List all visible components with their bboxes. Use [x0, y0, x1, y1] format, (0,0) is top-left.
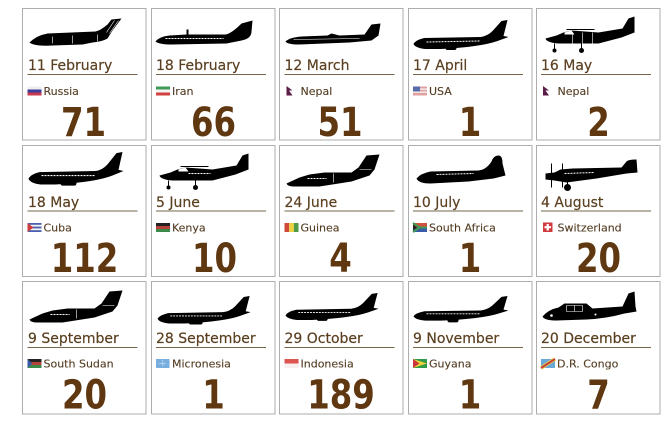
icon: plane [160, 154, 248, 190]
country: D.R. Congo [557, 358, 619, 370]
country: South Sudan [44, 358, 114, 370]
country: Nepal [300, 85, 332, 98]
flag: Nepal [286, 86, 292, 96]
number: 51 [317, 99, 363, 146]
date: 17 April [413, 58, 467, 74]
card: 28 September Micronesia [152, 282, 275, 418]
flag: USA [413, 86, 427, 96]
card: 18 May Cuba [22, 146, 146, 282]
card: 5 June Kenya [152, 146, 275, 282]
date: 9 September [28, 331, 119, 347]
flag: Indonesia [284, 359, 298, 368]
number: 1 [202, 371, 225, 418]
flag: Iran [156, 86, 170, 96]
number: 7 [587, 371, 610, 418]
flag: South Africa [413, 223, 427, 232]
card: 11 February Russia [22, 8, 146, 146]
date: 28 September [156, 331, 256, 347]
card: 10 July South Africa [408, 146, 532, 282]
card: 20 December D.R. Congo [536, 282, 660, 418]
date: 10 July [413, 195, 460, 211]
country: Micronesia [172, 358, 231, 370]
flag: Guinea [284, 223, 298, 232]
number: 66 [191, 99, 236, 146]
card: 12 March Nepal [280, 8, 403, 146]
date: 20 December [541, 331, 636, 347]
date: 9 November [413, 331, 499, 347]
date: 11 February [28, 58, 112, 74]
number: 71 [61, 99, 106, 146]
icon: plane [286, 154, 380, 186]
icon: plane [546, 160, 638, 191]
country: Guinea [300, 222, 340, 234]
card: 18 February Iran [152, 8, 275, 146]
country: Indonesia [300, 358, 354, 370]
number: 112 [51, 235, 118, 282]
country: Kenya [172, 222, 206, 234]
date: 4 August [541, 195, 604, 211]
date: 16 May [541, 58, 592, 74]
country: Guyana [429, 358, 471, 370]
country: Iran [172, 85, 194, 98]
country: USA [429, 85, 452, 98]
country: Russia [44, 85, 79, 98]
date: 24 June [284, 195, 337, 211]
flag: Guyana [413, 359, 427, 368]
number: 10 [192, 235, 237, 282]
card: 16 May Nepal [536, 8, 660, 146]
date: 29 October [284, 331, 363, 347]
number: 1 [459, 235, 481, 282]
flag: Nepal [543, 86, 549, 96]
flag: D.R. Congo [541, 359, 555, 368]
card: 9 September South Sudan [22, 282, 146, 418]
icon: plane [414, 20, 508, 50]
icon: plane [546, 16, 634, 53]
icon: plane [28, 152, 124, 186]
date: 18 May [28, 195, 79, 211]
card: 24 June Guinea [280, 146, 403, 282]
card: 17 April USA [408, 8, 532, 146]
card: 29 October Indonesia [280, 282, 403, 418]
country: Nepal [558, 85, 589, 98]
country: Cuba [44, 222, 72, 234]
date: 5 June [156, 195, 200, 211]
number: 1 [459, 99, 481, 146]
flag: Russia [28, 86, 42, 96]
number: 189 [307, 371, 375, 418]
icon: plane [158, 296, 251, 324]
icon: plane [30, 290, 122, 322]
flag: Cuba [28, 223, 42, 232]
number: 2 [587, 99, 610, 146]
icon: plane [542, 292, 636, 320]
card: 4 August Switzerland [536, 146, 660, 282]
number: 4 [329, 235, 352, 282]
flag: Switzerland [543, 222, 552, 232]
number: 20 [62, 371, 107, 418]
number: 1 [459, 371, 481, 418]
icon: plane [156, 20, 252, 44]
icon: plane [286, 293, 379, 321]
country: South Africa [429, 222, 496, 234]
flag: Micronesia [156, 359, 170, 368]
date: 18 February [156, 58, 240, 74]
flag: South Sudan [28, 359, 42, 368]
country: Switzerland [558, 222, 622, 234]
icon: plane [416, 156, 506, 184]
number: 20 [576, 235, 621, 282]
icon: plane [414, 296, 508, 322]
flag: Kenya [156, 223, 170, 232]
date: 12 March [284, 58, 349, 74]
icon: plane [30, 18, 122, 46]
card: 9 November Guyana [408, 282, 532, 418]
icon: plane [286, 24, 380, 44]
